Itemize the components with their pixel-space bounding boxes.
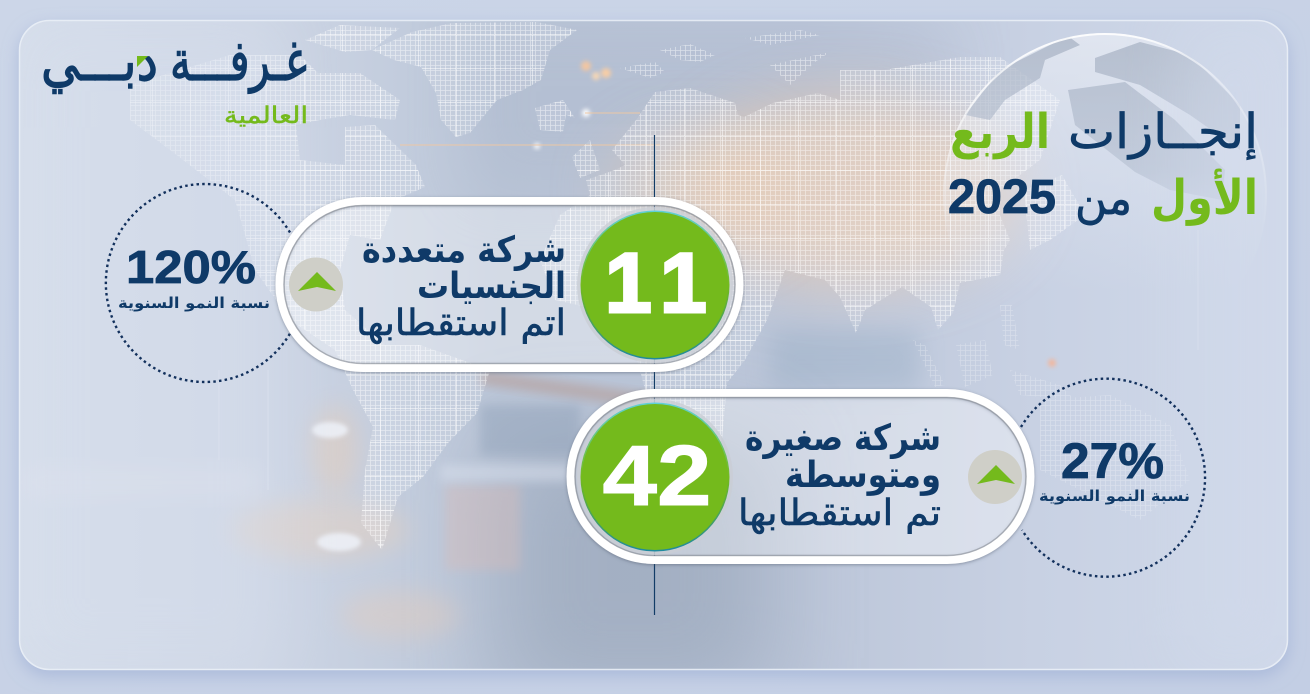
pill shape [280, 201, 740, 368]
dotted circle: 120% growth [106, 184, 290, 382]
title word: of: من [1075, 171, 1132, 226]
title word: first: الأول [1151, 168, 1258, 226]
logo subtitle: العالمية [224, 103, 308, 129]
value 27%: 27% [1061, 433, 1164, 489]
pill text: تم استقطابها [738, 493, 941, 534]
pill text: اتم استقطابها [356, 303, 566, 344]
pill: 42 SMEs [570, 393, 1030, 560]
number 11: 1 [660, 236, 707, 330]
logo: Dubai Chamber Global [41, 29, 308, 129]
dotted circle: 27% growth [1021, 379, 1205, 577]
left and right frosted fade [128, 51, 1263, 564]
caption: نسبة النمو السنوية [118, 294, 270, 312]
number circle [577, 207, 733, 363]
arrow badge [968, 450, 1022, 504]
number 11: 1 [605, 236, 652, 330]
pill text [356, 230, 566, 344]
world map [130, 22, 1190, 550]
pill shape [570, 393, 1030, 560]
pill text [738, 418, 941, 534]
pill text: ومتوسطة [785, 455, 941, 496]
pill text: شركة متعددة [362, 230, 566, 271]
title word: achievements: إنجــازات [1068, 104, 1258, 160]
title word: quarter: الربع [950, 104, 1050, 160]
pill text: شركة صغيرة [745, 418, 941, 459]
caption: نسبة النمو السنوية [1039, 487, 1190, 505]
pill text: الجنسيات [417, 266, 566, 307]
value 120%: 120% [126, 241, 256, 293]
bright lights [219, 61, 1198, 551]
logo wordmark: dubai: دبـــي [41, 29, 158, 94]
globe [943, 33, 1266, 225]
title [948, 104, 1258, 226]
arrow badge [289, 258, 343, 312]
logo accent [137, 56, 148, 67]
number 42: 42 [602, 429, 712, 524]
logo wordmark: chamber: غـرفـــة [170, 29, 307, 94]
title year: 2025 [948, 171, 1056, 224]
pill: 11 multinationals [280, 201, 740, 368]
pill glass fill [572, 395, 1029, 558]
number circle [577, 399, 733, 555]
pill glass fill [281, 203, 738, 366]
center vertical line [654, 135, 656, 615]
blurred photo tones [20, 20, 1020, 694]
